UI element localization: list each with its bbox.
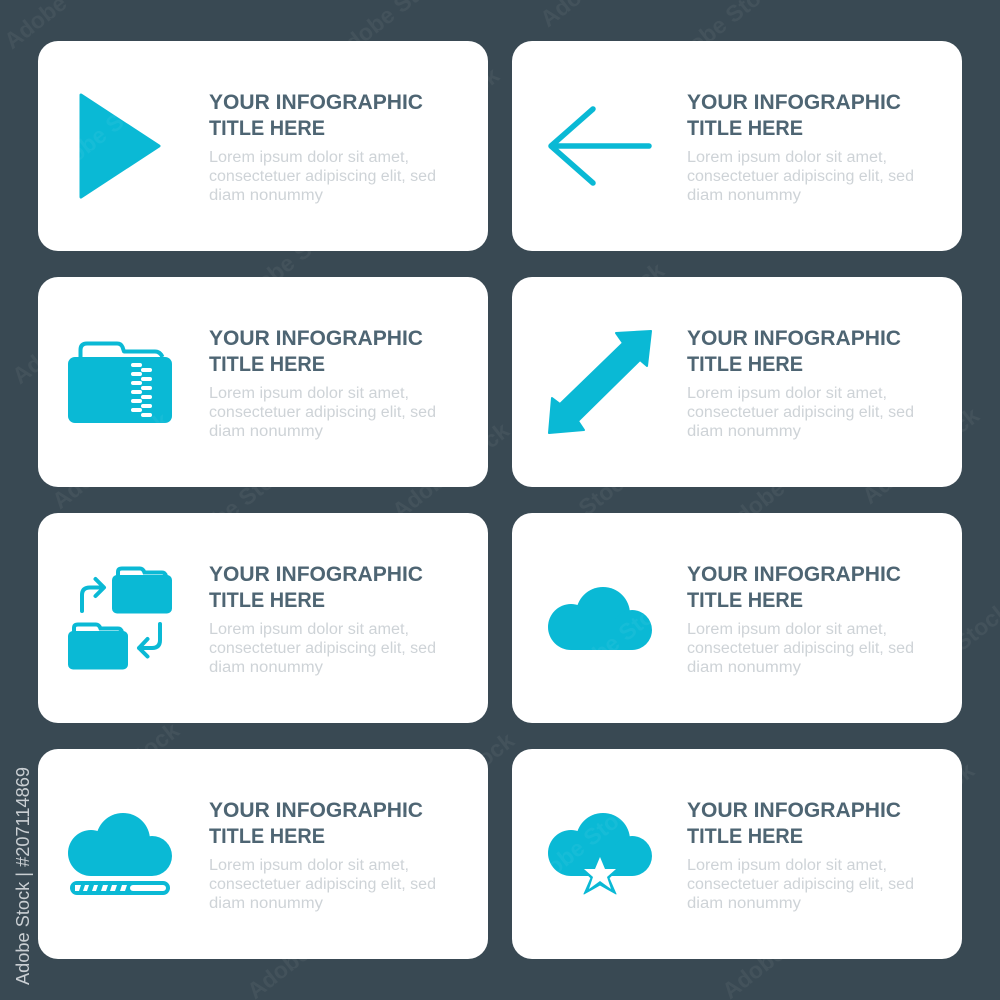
text block: diagonal arrow card description: Lorem ipsum dolor sit amet, [687,385,887,402]
text: Adobe Stock [717,432,844,539]
text: Adobe Stock [517,792,644,899]
text: Adobe Stock [857,402,984,509]
heading: diagonal arrow card title: TITLE HERE [687,353,803,376]
text: Adobe Stock [832,137,959,244]
text: Adobe Stock [852,757,979,864]
heading: cloud card title [687,563,901,612]
text block: cloud card description: consectetuer adipiscing elit, sed [687,640,914,657]
text: Adobe Stock [39,79,166,186]
text: Adobe Stock [47,407,174,514]
text: Adobe Stock [392,727,519,834]
text block: cloud star card description: diam nonummy [687,895,801,912]
text block: folder swap card description: Lorem ipsum dolor sit amet, [209,621,409,638]
icon: folders exchanging [68,568,172,670]
text block: diagonal arrow card description: consectetuer adipiscing elit, sed [687,404,914,421]
text block: zip folder card description [209,385,436,440]
heading: zip folder card title [209,327,423,376]
heading: left arrow card title: YOUR INFOGRAPHIC [687,91,901,114]
heading: play card title [209,91,423,140]
stock id caption: Adobe Stock | #207114869 [12,767,33,985]
icon: cloud [548,587,652,650]
heading: cloud card title: TITLE HERE [687,589,803,612]
panel: diagonal arrow card [512,277,962,487]
text block: diagonal arrow card description: diam nonummy [687,423,801,440]
heading: play card title: YOUR INFOGRAPHIC [209,91,423,114]
text block: play card description [209,149,436,204]
text block: diagonal arrow card description [687,385,914,440]
text block: cloud progress card description: consectetuer adipiscing elit, sed [209,876,436,893]
heading: cloud star card title [687,799,901,848]
text: Adobe Stock [552,587,679,694]
heading: zip folder card title: YOUR INFOGRAPHIC [209,327,423,350]
text block: zip folder card description: Lorem ipsum dolor sit amet, [209,385,409,402]
text: Adobe Stock [167,122,294,229]
text block: cloud card description: Lorem ipsum dolor sit amet, [687,621,887,638]
heading: zip folder card title: TITLE HERE [209,353,325,376]
panel: cloud card [512,513,962,723]
text: Adobe Stock [57,717,184,824]
text block: cloud star card description: Lorem ipsum dolor sit amet, [687,857,887,874]
panel: cloud progress card [38,749,488,959]
panel: play card [38,41,488,251]
heading: left arrow card title [687,91,901,140]
icon: cloud with progress bar [68,813,172,894]
text block: cloud star card description [687,857,914,912]
text block: cloud card description: diam nonummy [687,659,801,676]
text: Adobe Stock [347,617,474,724]
text block: folder swap card description: diam nonummy [209,659,323,676]
text block: cloud progress card description: diam nonummy [209,895,323,912]
heading: play card title: TITLE HERE [209,117,325,140]
panel: folder swap card [38,513,488,723]
text block: zip folder card description: diam nonummy [209,423,323,440]
text block: left arrow card description [687,149,914,204]
icon: cloud with star [548,813,652,894]
text block: cloud card description [687,621,914,676]
text block: cloud star card description: consectetuer adipiscing elit, sed [687,876,914,893]
heading: folder swap card title [209,563,423,612]
heading: left arrow card title: TITLE HERE [687,117,803,140]
text block: folder swap card description: consectetuer adipiscing elit, sed [209,640,436,657]
icon: zipped folder [68,344,172,423]
text block: play card description: Lorem ipsum dolor sit amet, [209,149,409,166]
text block: left arrow card description: diam nonummy [687,187,801,204]
text block: left arrow card description: Lorem ipsum dolor sit amet, [687,149,887,166]
text: Adobe Stock [7,282,134,389]
panel: cloud star card [512,749,962,959]
heading: cloud card title: YOUR INFOGRAPHIC [687,563,901,586]
text: Adobe Stock [227,207,354,314]
heading: cloud star card title: YOUR INFOGRAPHIC [687,799,901,822]
heading: folder swap card title: TITLE HERE [209,589,325,612]
text: Adobe Stock [387,417,514,524]
text block: play card description: consectetuer adipiscing elit, sed [209,168,436,185]
text block: play card description: diam nonummy [209,187,323,204]
icon: left arrow [551,109,649,183]
text: Adobe Stock [542,257,669,364]
icon: diagonal double arrow [549,331,651,433]
text block: cloud progress card description: Lorem ipsum dolor sit amet, [209,857,409,874]
heading: cloud progress card title: YOUR INFOGRAPHIC [209,799,423,822]
heading: cloud star card title: TITLE HERE [687,825,803,848]
panel: zip folder card [38,277,488,487]
heading: folder swap card title: YOUR INFOGRAPHIC [209,563,423,586]
icon: play triangle [81,95,159,197]
text block: left arrow card description: consectetuer adipiscing elit, sed [687,168,914,185]
text: Adobe Stock [512,462,639,569]
text block: folder swap card description [209,621,436,676]
heading: diagonal arrow card title: YOUR INFOGRAPHIC [687,327,901,350]
heading: diagonal arrow card title [687,327,901,376]
heading: cloud progress card title [209,799,423,848]
text block: cloud progress card description [209,857,436,912]
heading: cloud progress card title: TITLE HERE [209,825,325,848]
text: Adobe Stock [172,452,299,559]
panel: left arrow card [512,41,962,251]
text block: zip folder card description: consectetuer adipiscing elit, sed [209,404,436,421]
text: Adobe Stock [377,62,504,169]
